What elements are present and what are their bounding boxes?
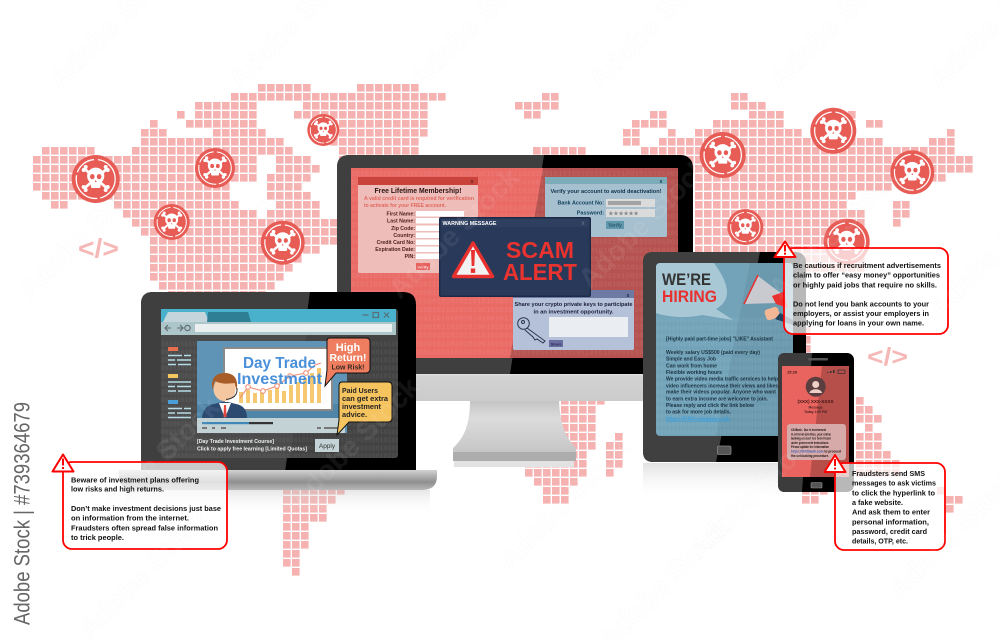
tablet home button xyxy=(718,446,731,454)
popup: crypto private keys: x xyxy=(627,293,630,299)
popup: free lifetime membership form: x xyxy=(471,179,474,185)
laptop screen xyxy=(161,309,398,458)
laptop screen: 1010010101010110101001010101001011010101001010110101010010110101001 xyxy=(161,341,422,348)
phone home button xyxy=(811,482,822,488)
monitor screen: 0101101010010101011010100101010010110101001010100101101010100101011010101 xyxy=(351,214,680,222)
laptop screen: 1010010101010110101001010101001011010101001010110101010010110101001 xyxy=(161,453,422,460)
popup: crypto private keys: in an investment opportunity. xyxy=(534,310,614,316)
popup: free lifetime membership form: First Name: xyxy=(386,212,415,218)
laptop screen: 0101101010100101010110100101010110101001010010101101010010101001011 xyxy=(161,349,422,356)
callout text: password, credit card xyxy=(852,527,927,536)
phone screen: Message xyxy=(809,406,823,410)
skull marker: central asia xyxy=(727,209,763,245)
popup: free lifetime membership form: Expiration Date: xyxy=(375,247,415,253)
speech bubble: we're hiring: HIRING xyxy=(662,288,717,306)
monitor screen: 0101101010010101011010100101010010110101001010100101101010100101011010101 xyxy=(351,180,680,188)
callout text: messages to ask victims xyxy=(852,479,936,488)
monitor screen: 1010100101010101001011010101001010101101010010101001010101101001010101001 xyxy=(351,290,680,298)
phone body xyxy=(778,353,854,492)
tablet screen: 10100101010101101010010101010010110101010 xyxy=(656,365,816,372)
job advert text: make their videos popular. Anyone who want xyxy=(666,390,776,396)
world map: south america xyxy=(283,487,346,577)
monitor screen: 1010100101010101001011010101001010101101010010101001010101101001010101001 xyxy=(351,256,680,264)
browser toolbar xyxy=(161,322,396,335)
speech bubble: high return xyxy=(325,338,370,386)
tablet screen: 01011010101001010101101001010101101010010 xyxy=(656,405,816,412)
callout text: Don’t make investment decisions just base xyxy=(71,504,221,513)
job advert text: Simple and Easy Job xyxy=(666,356,716,362)
sms message bubble xyxy=(787,424,846,460)
sms message bubble: XXXBank : Due to involvement xyxy=(791,428,827,432)
laptop screen: 1010010101010110101001010101001011010101001010110101010010110101001 xyxy=(161,421,422,428)
job advert text: Can work from home xyxy=(666,363,717,369)
callout text: to click the hyperlink to xyxy=(852,488,935,497)
skull marker: europe xyxy=(700,132,746,178)
code symbol left: </> xyxy=(78,234,119,264)
caption: day trade course xyxy=(197,439,307,452)
icon: key xyxy=(518,318,545,343)
monitor screen: 0101101010010101011010100101010010110101001010100101101010100101011010101 xyxy=(351,316,680,324)
skull marker: far east xyxy=(890,150,934,194)
laptop screen: 0101101010100101010110100101010110101001010010101101010010101001011 xyxy=(161,429,422,436)
popup: verify your account: Verify your account to avoid deactivation! xyxy=(550,189,662,195)
laptop screen: 1010010101010110101001010101001011010101001010110101010010110101001 xyxy=(161,373,422,380)
popup: verify your account: Bank Account No: xyxy=(557,200,604,206)
monitor screen: 0101101010010101011010100101010010110101001010100101101010100101011010101 xyxy=(351,282,680,290)
speech bubble: high return: High xyxy=(336,342,360,354)
popup: free lifetime membership form: Last Name: xyxy=(387,219,415,225)
tablet screen: 01011010101001010101101001010101101010010 xyxy=(656,373,816,380)
job advert text: to ask for more job details. xyxy=(666,410,732,416)
callout text: applying for loans in your own name. xyxy=(793,319,924,328)
speech bubble: high return: Low Risk! xyxy=(332,364,364,372)
tablet screen: 01011010101001010101101001010101101010010 xyxy=(656,421,816,428)
callout text: Fraudsters send SMS xyxy=(852,469,925,478)
tablet screen: 10100101010101101010010101010010110101010 xyxy=(656,381,816,388)
apply button: Apply xyxy=(319,443,336,450)
popup: crypto private keys xyxy=(513,290,634,350)
code symbol right: </> xyxy=(867,343,908,371)
callout text xyxy=(852,469,936,545)
popup: verify your account: Password: xyxy=(577,210,604,216)
video player: Day Trade xyxy=(243,355,316,372)
monitor screen: 1010100101010101001011010101001010101101010010101001010101101001010101001 xyxy=(351,341,680,349)
speech bubble: we're hiring xyxy=(656,263,733,320)
laptop screen: 0101101010100101010110100101010110101001010010101101010010101001011 xyxy=(161,381,422,388)
popup: free lifetime membership form: Free Lifetime Membership! xyxy=(374,186,462,195)
monitor screen: 0010110101001010100101010110101010010101101010010110101010010101010110100 xyxy=(351,332,680,340)
callout text: or highly paid jobs that require no skills. xyxy=(793,280,937,289)
monitor screen: 0101101010010101011010100101010010110101001010100101101010100101011010101 xyxy=(351,248,680,256)
tablet reflection xyxy=(643,463,806,499)
icon: warning triangle xyxy=(774,242,796,257)
browser title bar with tabs xyxy=(161,309,396,322)
phone screen: (XXX) XXX-XXXX xyxy=(798,399,834,404)
monitor screen: 0010110101001010100101010110101010010101101010010110101010010101010110100 xyxy=(351,196,680,204)
watermark overlay: Adobe Stock xyxy=(762,161,906,304)
job advert text: video influencers increase their views and likes xyxy=(666,383,778,389)
laptop screen: 0101101010100101010110100101010110101001010010101101010010101001011 xyxy=(161,445,422,452)
laptop screen: 1010010101010110101001010101001011010101001010110101010010110101001 xyxy=(161,389,422,396)
tablet screen xyxy=(656,263,793,436)
watermark overlay: Adobe Stock xyxy=(82,391,226,534)
tablet screen: 10100101010101101010010101010010110101010 xyxy=(656,333,816,340)
popup: free lifetime membership form: Zip Code: xyxy=(391,226,415,232)
caption: day trade course: [Day Trade Investment Course] xyxy=(197,439,274,445)
laptop base xyxy=(119,470,437,490)
sms message bubble: Please update the information xyxy=(791,445,829,449)
world map: north america xyxy=(33,84,447,300)
sms message bubble: banking account has been frozen xyxy=(791,437,831,441)
skull marker: west usa xyxy=(154,204,190,240)
job advert text: https://XXXcompany.com xyxy=(666,416,731,422)
sms message bubble: in criminal activities, your online xyxy=(791,432,831,436)
monitor screen: 0010110101001010100101010110101010010101101010010110101010010101010110100 xyxy=(351,298,680,306)
laptop screen: 0101101010100101010110100101010110101001010010101101010010101001011 xyxy=(161,413,422,420)
monitor screen: 1010100101010101001011010101001010101101010010101001010101101001010101001 xyxy=(351,171,680,179)
callout: recruitment scams xyxy=(774,242,948,334)
popup: free lifetime membership form xyxy=(358,177,478,273)
job advert text: to earn extra income are welcome to join. xyxy=(666,396,769,402)
speech bubble: paid users: investment xyxy=(342,404,382,411)
speech bubble: paid users: Paid Users xyxy=(342,388,378,395)
laptop reflection xyxy=(125,490,430,514)
popup: free lifetime membership form: to activate for your FREE account. xyxy=(364,203,447,209)
laptop screen: 1010010101010110101001010101001011010101001010110101010010110101001 xyxy=(161,437,422,444)
phone screen xyxy=(782,366,849,477)
callout text: details, OTP, etc. xyxy=(852,536,908,545)
popup: verify your account: x xyxy=(660,179,663,185)
monitor screen: 0010110101001010100101010110101010010101101010010110101010010101010110100 xyxy=(351,230,680,238)
callout text: claim to offer “easy money” opportunities xyxy=(793,271,940,280)
phone screen: 15:20 xyxy=(787,370,798,374)
laptop screen: 1010010101010110101001010101001011010101001010110101010010110101001 xyxy=(161,405,422,412)
world map: eurasia xyxy=(515,93,974,354)
skull marker: alaska xyxy=(72,155,120,203)
callout text: to trick people. xyxy=(71,533,124,542)
trend line xyxy=(240,363,321,398)
watermark overlay: Adobe Stock xyxy=(282,371,426,514)
tablet screen: 10100101010101101010010101010010110101010 xyxy=(656,349,816,356)
job advert text xyxy=(666,336,778,422)
monitor body xyxy=(337,155,693,401)
tablet xyxy=(643,252,820,462)
popup: verify your account xyxy=(545,177,667,237)
laptop xyxy=(119,292,437,490)
popup: verify your account: Verify xyxy=(608,223,622,229)
monitor screen: 1010100101010101001011010101001010101101010010101001010101101001010101001 xyxy=(351,273,680,281)
apply button xyxy=(315,439,339,452)
skull marker: russia xyxy=(810,108,856,154)
world map: south east asia and australia xyxy=(802,397,964,514)
watermark overlay: Adobe Stock xyxy=(682,421,826,564)
speech bubble: high return: Return! xyxy=(330,353,366,364)
skull threat markers xyxy=(72,108,934,265)
callout text: Do not lend you bank accounts to your xyxy=(793,300,929,309)
video player: Investment xyxy=(237,371,322,388)
monitor screen: 0010110101001010100101010110101010010101101010010110101010010101010110100 xyxy=(351,264,680,272)
monitor screen: 1010100101010101001011010101001010101101010010101001010101101001010101001 xyxy=(351,307,680,315)
tablet screen: 10100101010101101010010101010010110101010 xyxy=(656,429,816,436)
callout text: a fake website. xyxy=(852,498,903,507)
skull marker: east usa xyxy=(261,221,305,265)
tablet screen: 01011010101001010101101001010101101010010 xyxy=(656,357,816,364)
tablet screen: 10100101010101101010010101010010110101010 xyxy=(656,413,816,420)
popup: crypto private keys: Share xyxy=(550,341,562,346)
callout text: And ask them to enter xyxy=(852,508,930,517)
video player xyxy=(197,341,347,433)
callout: sms scams xyxy=(824,455,945,550)
popup: free lifetime membership form: Credit Card No: xyxy=(377,240,415,246)
callout text: Beware of investment plans offering xyxy=(71,475,199,484)
callout: investment scams xyxy=(52,454,227,549)
monitor screen: 1010100101010101001011010101001010101101010010101001010101101001010101001 xyxy=(351,205,680,213)
speech bubble: we're hiring: WE’RE xyxy=(662,271,711,289)
callout text: personal information, xyxy=(852,517,929,526)
world map: africa and madagascar xyxy=(525,397,624,505)
tablet screen: 10100101010101101010010101010010110101010 xyxy=(656,317,816,324)
icon: megaphone xyxy=(744,275,793,325)
presenter xyxy=(202,373,247,418)
skull marker: canada xyxy=(195,148,235,188)
popup: crypto private keys: Share your crypto private keys to participate xyxy=(514,302,632,308)
tablet body xyxy=(643,252,806,462)
popup: scam alert warning message: SCAM xyxy=(506,237,574,263)
monitor screen: 1010100101010101001011010101001010101101010010101001010101101001010101001 xyxy=(351,188,680,196)
job advert text: Flexible working hours xyxy=(666,370,722,376)
speech bubble: paid users: can get extra xyxy=(342,396,388,403)
monitor screen: 1010100101010101001011010101001010101101010010101001010101101001010101001 xyxy=(351,239,680,247)
watermark overlay: Adobe Stock xyxy=(572,151,716,294)
laptop body xyxy=(141,292,416,474)
callout text: Fraudsters often spread false information xyxy=(71,523,218,532)
skull marker: greenland xyxy=(307,114,339,146)
watermark overlay: Adobe Stock xyxy=(182,151,326,294)
caption: day trade course: Click to apply free learning [Limited Quotas] xyxy=(197,446,307,452)
desktop monitor xyxy=(337,155,693,467)
monitor screen xyxy=(351,168,684,358)
callout text: employers, or assist your employers in xyxy=(793,309,929,318)
tablet screen: 10100101010101101010010101010010110101010 xyxy=(656,397,816,404)
popup: verify your account: ★★★★★★ xyxy=(608,210,639,218)
callout text xyxy=(71,475,221,542)
sidebar list blocks xyxy=(168,347,191,418)
monitor screen: 1010100101010101001011010101001010101101010010101001010101101001010101001 xyxy=(351,324,680,332)
callout text xyxy=(793,261,941,328)
watermark overlay: Adobe Stock xyxy=(72,501,216,640)
sms message bubble: https://XXXbank.com to proceed xyxy=(791,450,841,454)
phone xyxy=(778,353,854,492)
job advert text: [Highly paid part-time jobs] "LIKE" Assistant xyxy=(666,336,773,342)
laptop screen: 0101101010100101010110100101010110101001010010101101010010101001011 xyxy=(161,397,422,404)
tablet screen: 01011010101001010101101001010101101010010 xyxy=(656,389,816,396)
vertical stock attribution: Adobe Stock | #739364679 xyxy=(10,402,34,625)
popup: free lifetime membership form: Verify xyxy=(418,264,429,269)
icon: warning triangle xyxy=(824,455,846,472)
popup: free lifetime membership form: PIN: xyxy=(405,254,415,260)
popup: scam alert warning message: ALERT xyxy=(503,259,578,285)
tablet screen: 01011010101001010101101001010101101010010 xyxy=(656,325,816,332)
monitor stand xyxy=(453,400,576,467)
watermark overlay: Adobe Stock xyxy=(12,161,156,304)
popup: scam alert warning message: x xyxy=(581,221,585,227)
job advert text: Please reply and click the link below xyxy=(666,403,754,409)
popup: free lifetime membership form: A valid credit card is required for verification xyxy=(364,196,474,202)
job advert text: Weekly salary US$500 (paid every day) xyxy=(666,350,760,356)
popup: scam alert warning message: WARNING MESSAGE xyxy=(442,221,497,227)
watermark overlay: Adobe Stock xyxy=(382,161,526,304)
callout text: Be cautious if recruitment advertisements xyxy=(793,261,941,270)
job advert text: We provide video media traffic services to help xyxy=(666,377,778,383)
icon: warning triangle xyxy=(52,454,74,472)
monitor screen: 0101101010010101011010100101010010110101001010100101101010100101011010101 xyxy=(351,350,680,358)
callout text: on information from the internet. xyxy=(71,514,189,523)
speech bubble: paid users: advice. xyxy=(342,412,367,419)
sms message bubble: the unblocking procedure. xyxy=(791,454,829,458)
watermark overlay: Adobe Stock xyxy=(492,431,636,574)
sms message bubble: under government instructions. xyxy=(791,441,829,445)
bar chart xyxy=(239,368,321,403)
monitor screen: 1010100101010101001011010101001010101101010010101001010101101001010101001 xyxy=(351,222,680,230)
icon: warning triangle xyxy=(454,243,492,276)
popup: free lifetime membership form: Country: xyxy=(393,233,415,239)
callout text: low risks and high returns. xyxy=(71,485,164,494)
tablet screen: 01011010101001010101101001010101101010010 xyxy=(656,341,816,348)
laptop screen: 1010010101010110101001010101001011010101001010110101010010110101001 xyxy=(161,357,422,364)
popup: scam alert warning message xyxy=(439,217,591,297)
player controls xyxy=(197,418,345,433)
speech bubble: paid users xyxy=(337,382,392,435)
skull marker: china xyxy=(824,219,870,265)
icon: contact avatar xyxy=(806,377,826,397)
laptop screen: 0101101010100101010110100101010110101001010010101101010010101001011 xyxy=(161,365,422,372)
phone screen: Today 1:00 PM xyxy=(804,410,827,414)
